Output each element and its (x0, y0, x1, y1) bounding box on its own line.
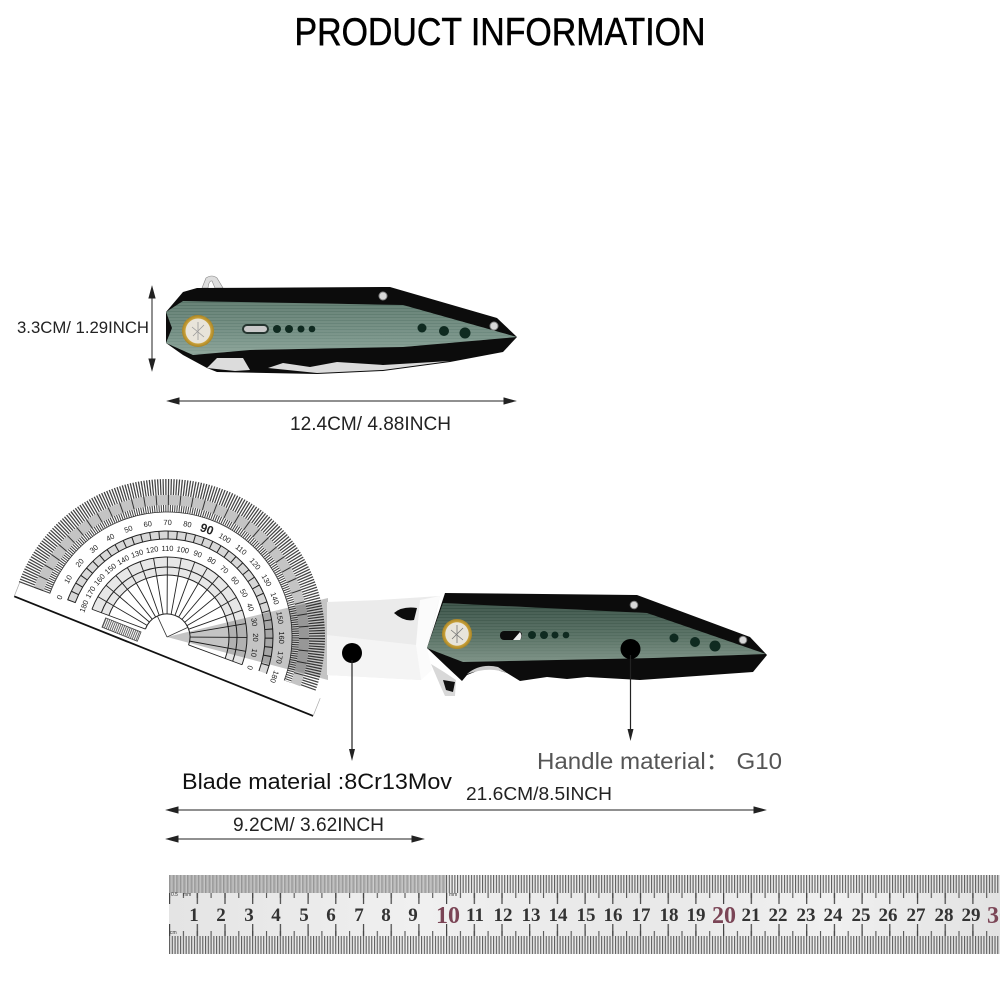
open knife black handle (427, 593, 767, 681)
protractor (14, 436, 377, 716)
blade thumb hole (394, 608, 417, 620)
inner degree numbers: 160 (92, 572, 107, 587)
inner degree numbers: 0 (245, 664, 255, 671)
ruler numbers: 5 (299, 905, 309, 926)
blade seen through protractor (167, 598, 328, 680)
top millimetre ticks (446, 875, 1000, 893)
base edge (14, 596, 313, 716)
handle callout (620, 639, 640, 741)
inner degree numbers: 50 (238, 587, 250, 599)
blade tang glint (467, 666, 507, 674)
closed knife slot and holes (243, 324, 470, 338)
handle material label: Handle material： G10 (537, 748, 782, 774)
ruler numbers: 26 (878, 905, 898, 926)
bottom long ticks (169, 931, 1000, 936)
bottom centimetre ticks (169, 924, 1000, 936)
outer degree numbers: 30 (88, 543, 100, 555)
inner scale arcs (68, 501, 303, 674)
outer degree numbers: 100 (217, 531, 232, 545)
inner scale dividers (71, 506, 298, 672)
ruler numbers: 7 (354, 905, 364, 926)
hub lines (152, 616, 188, 643)
inner degree numbers: 20 (251, 633, 260, 642)
inner degree numbers: 10 (249, 648, 259, 658)
ruler numbers: 25 (852, 905, 870, 926)
inner degree numbers: 170 (84, 585, 98, 600)
ruler numbers: 3 (244, 905, 254, 926)
top half-millimetre ticks (169, 875, 446, 893)
inner degree numbers (78, 518, 286, 675)
ruler small marks: 0.5 (171, 892, 178, 898)
ruler numbers: 21 (742, 905, 760, 926)
open knife pivot (442, 619, 472, 649)
outer degree numbers: 170 (274, 651, 285, 664)
blade heel highlight (416, 596, 440, 680)
outer degree numbers: 140 (268, 591, 281, 606)
blade material label: Blade material :8Cr13Mov (182, 769, 453, 794)
inner degree numbers: 70 (218, 563, 230, 576)
dotted band (100, 546, 258, 662)
outer degree numbers: 50 (123, 524, 134, 535)
inner degree numbers: 180 (78, 599, 90, 614)
ruler small marks: cm (170, 930, 177, 936)
outer degree numbers: 130 (259, 573, 273, 588)
ruler numbers: 20 (712, 903, 736, 929)
open knife (327, 593, 767, 696)
outer degree numbers: 160 (277, 631, 286, 644)
closed knife (166, 276, 517, 374)
ruler numbers: 28 (934, 905, 954, 926)
outer degree numbers: 0 (55, 594, 65, 601)
protractor logo box (102, 618, 141, 641)
radial lines (92, 534, 270, 665)
height label: 3.3CM/ 1.29INCH (17, 318, 149, 337)
overall length label: 21.6CM/8.5INCH (466, 783, 612, 804)
ruler numbers: 9 (408, 905, 418, 926)
middle cell ring (39, 461, 343, 685)
closed knife blade edge (207, 358, 450, 373)
outer degree numbers: 10 (62, 573, 74, 585)
flipper tab (431, 664, 456, 696)
inner degree numbers: 150 (103, 561, 118, 576)
ruler numbers: 4 (271, 905, 281, 926)
pocket clip tip (202, 276, 223, 288)
ruler numbers: 29 (962, 905, 980, 926)
outer degree numbers: 60 (143, 519, 153, 529)
blade callout (342, 643, 362, 761)
closed knife black handle (166, 287, 517, 374)
closed knife green scale (166, 301, 517, 355)
inner degree numbers: 130 (130, 547, 145, 560)
top centimetre ticks (169, 893, 1000, 904)
closed length arrow (168, 398, 515, 404)
top long ticks (169, 893, 1000, 898)
open knife green scale (427, 603, 766, 662)
inner degree numbers: 30 (249, 617, 259, 627)
outer degree numbers (53, 481, 321, 684)
outer degree numbers: 20 (74, 557, 86, 569)
inner degree numbers: 90 (192, 548, 203, 560)
outer degree numbers: 120 (248, 556, 263, 572)
ruler numbers: 8 (381, 905, 391, 926)
ruler numbers: 24 (824, 905, 843, 926)
ruler numbers: 23 (796, 905, 816, 926)
height dimension arrow (149, 287, 155, 370)
outer ring boundary (50, 476, 328, 680)
bottom millimetre ticks (169, 936, 1000, 954)
inner scale cells (71, 506, 298, 672)
outer degree numbers: 110 (234, 542, 249, 557)
ruler small marks: mm (449, 892, 457, 898)
ruler (169, 875, 1000, 954)
ruler numbers: 19 (686, 905, 706, 926)
ruler numbers: 1 (189, 905, 199, 926)
ruler numbers: 14 (548, 905, 568, 926)
ruler numbers: 10 (436, 903, 460, 929)
closed knife pivot (182, 315, 214, 347)
overall length arrow (167, 807, 765, 813)
inner degree numbers: 100 (176, 544, 190, 555)
outer degree numbers: 180 (268, 669, 281, 684)
ruler numbers: 12 (494, 905, 512, 926)
flipper hole (443, 680, 455, 692)
open knife blade (327, 596, 440, 680)
ruler body (169, 875, 1000, 954)
inner degree ticks (46, 472, 332, 682)
inner degree numbers: 60 (229, 574, 241, 587)
ruler numbers: 15 (576, 905, 596, 926)
outer degree numbers: 80 (183, 519, 192, 530)
ruler numbers (189, 903, 1000, 929)
protractor scale rings (24, 444, 360, 695)
inner degree numbers: 80 (206, 555, 218, 567)
ruler small marks (170, 892, 457, 936)
ruler numbers: 16 (604, 905, 622, 926)
base side edges (14, 579, 320, 716)
inner degree numbers: 110 (161, 544, 173, 553)
open knife slot and holes (500, 631, 720, 652)
ruler numbers: 13 (522, 905, 540, 926)
closed length label: 12.4CM/ 4.88INCH (290, 414, 451, 435)
ruler numbers: 11 (466, 905, 484, 926)
ruler numbers: 17 (632, 905, 651, 926)
outer degree numbers: 90 (198, 520, 216, 538)
open knife screws (630, 601, 747, 644)
blade length label: 9.2CM/ 3.62INCH (233, 815, 384, 836)
ruler numbers: 2 (216, 905, 226, 926)
ruler numbers: 18 (660, 905, 678, 926)
outer degree numbers: 40 (104, 532, 116, 544)
ruler numbers: 22 (768, 905, 788, 926)
middle cell dividers (39, 461, 343, 685)
inner degree numbers: 120 (145, 544, 159, 555)
outer degree numbers: 150 (274, 611, 285, 625)
inner degree numbers: 40 (245, 602, 256, 613)
ruler numbers: 6 (326, 905, 336, 926)
ruler numbers: 27 (906, 905, 926, 926)
outer degree numbers: 70 (163, 518, 172, 527)
blade bevel shading (327, 635, 421, 680)
closed knife screws (379, 292, 498, 330)
ruler small marks: mm (183, 892, 191, 898)
blade length arrow (167, 836, 423, 842)
title: PRODUCT INFORMATION (294, 11, 706, 54)
inner degree numbers: 140 (115, 553, 131, 567)
outer degree ticks (26, 444, 360, 689)
